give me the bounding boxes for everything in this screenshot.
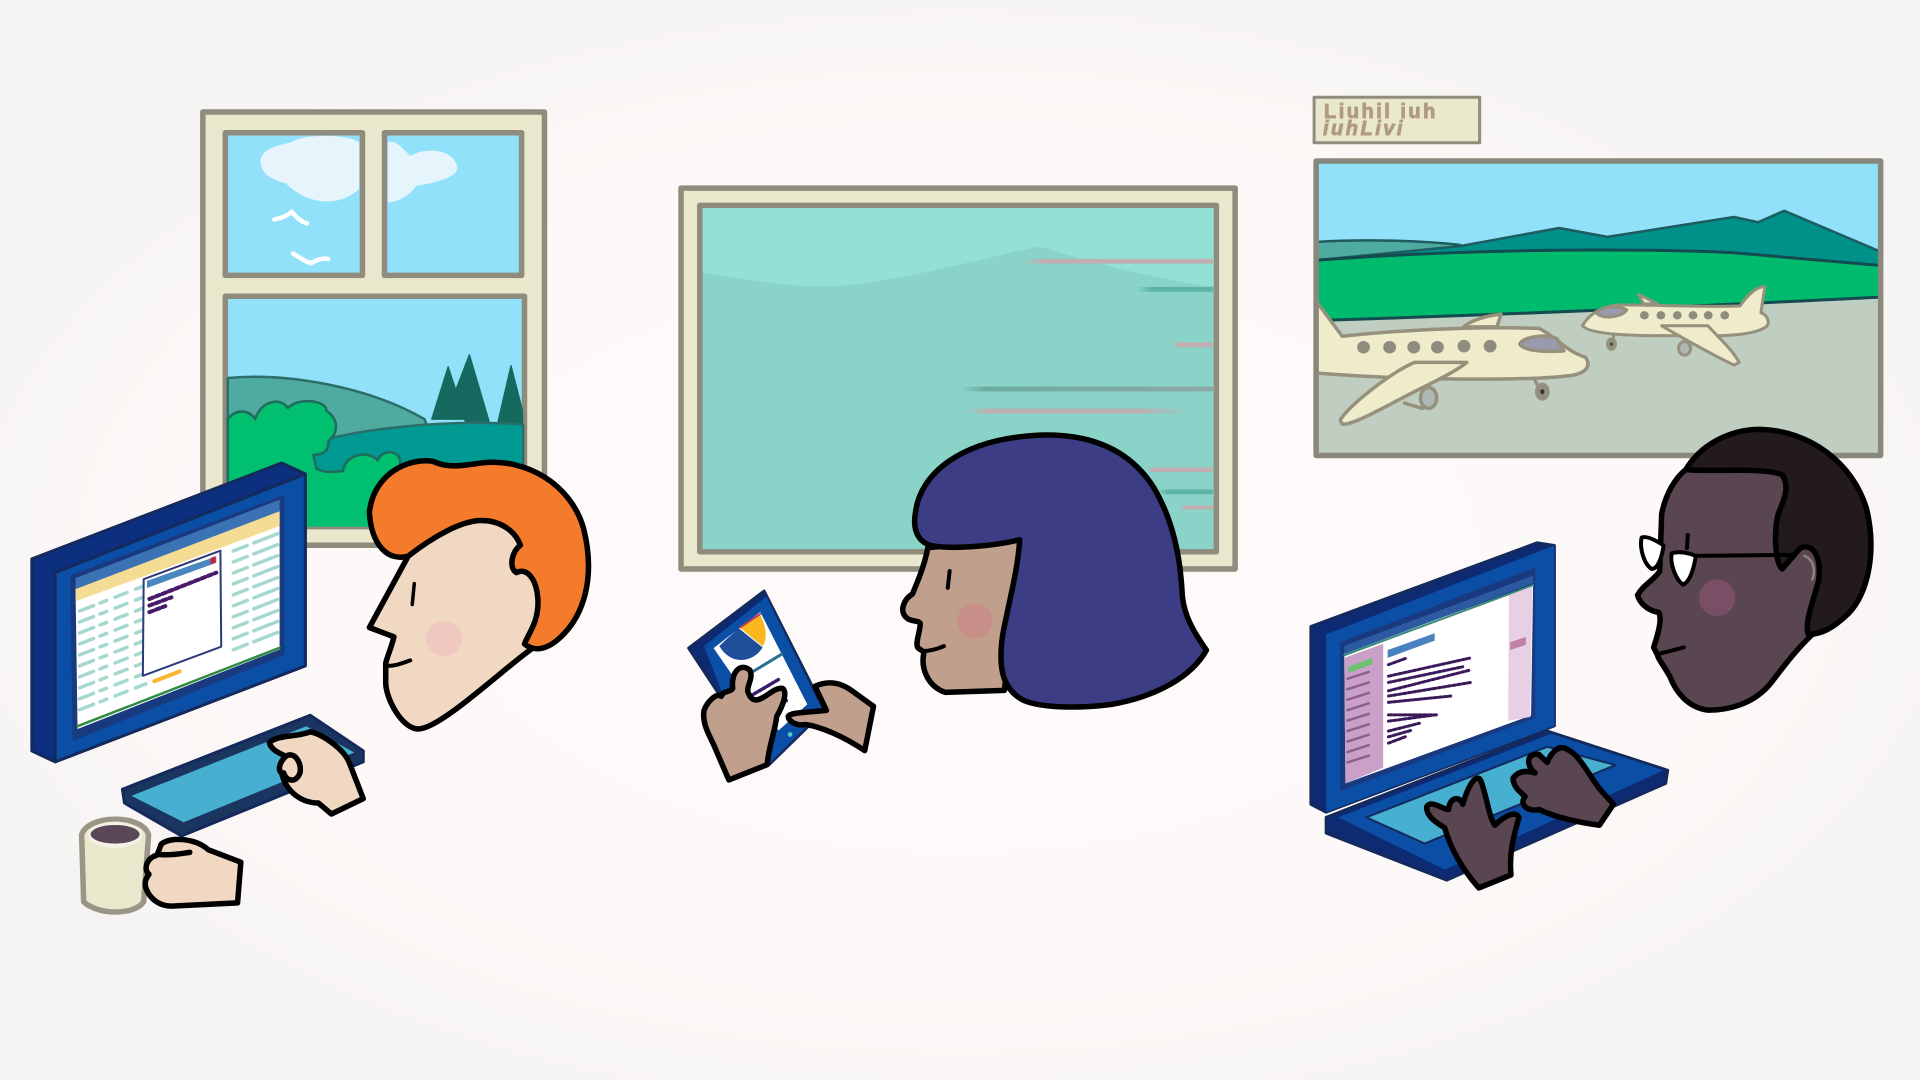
left hand typing xyxy=(1427,778,1519,888)
sign plate lettering: iuhLivi xyxy=(1323,118,1405,140)
eye xyxy=(948,571,950,588)
desktop monitor xyxy=(32,463,305,762)
glasses xyxy=(1641,537,1792,585)
small sign plate xyxy=(1314,97,1480,143)
mountains xyxy=(1318,239,1462,258)
lighter sky band xyxy=(703,208,1214,287)
left scene: man at desktop computer xyxy=(32,112,588,912)
laptop base xyxy=(1326,731,1668,880)
pie chart xyxy=(719,614,766,660)
man's right hand on keyboard xyxy=(269,732,363,814)
man's left hand on mug xyxy=(145,839,241,906)
cheek xyxy=(1699,579,1735,616)
cloud in right pane xyxy=(388,142,457,202)
coffee mug xyxy=(82,819,149,912)
laptop lid xyxy=(1311,543,1554,812)
document sidebars xyxy=(1344,644,1383,783)
keyboard xyxy=(122,715,363,836)
cheek xyxy=(957,603,993,638)
right scene: man with laptop xyxy=(1311,97,1883,888)
mouth xyxy=(1658,647,1684,654)
window with landscape view xyxy=(203,112,544,545)
birds xyxy=(274,212,328,263)
painting of airfield xyxy=(1314,161,1883,457)
green field xyxy=(1314,250,1883,321)
window with blurred passing landscape xyxy=(681,188,1235,569)
man's head xyxy=(369,461,588,729)
mouth xyxy=(388,660,410,666)
painting frame xyxy=(1316,161,1881,455)
landscape xyxy=(228,355,523,529)
cheek xyxy=(426,621,462,656)
dialog window xyxy=(143,551,221,676)
motion streaks xyxy=(960,259,1213,510)
head of man with glasses xyxy=(1638,429,1871,710)
centre scene: woman with tablet xyxy=(681,188,1235,780)
eye xyxy=(1685,535,1690,548)
small aeroplane xyxy=(1583,287,1768,365)
spreadsheet on screen xyxy=(76,500,280,729)
woman's head xyxy=(903,435,1206,707)
tarmac xyxy=(1314,292,1883,457)
eye xyxy=(412,584,414,604)
cloud in left pane xyxy=(260,136,359,201)
right hand typing xyxy=(1513,748,1613,825)
large aeroplane xyxy=(1314,300,1588,424)
navy hair xyxy=(915,435,1206,707)
laptop xyxy=(1311,543,1668,880)
ear detail xyxy=(1804,556,1814,579)
woman's left hand on tablet xyxy=(704,667,785,780)
tablet xyxy=(689,591,825,765)
dark hair xyxy=(1686,429,1871,634)
document text xyxy=(1388,658,1471,743)
illustration stage xyxy=(30,96,1884,915)
orange hair xyxy=(369,461,588,649)
mouth xyxy=(924,646,944,651)
woman's right hand on tablet xyxy=(788,683,874,751)
sign plate lettering: Liuhil iuh xyxy=(1324,101,1438,123)
